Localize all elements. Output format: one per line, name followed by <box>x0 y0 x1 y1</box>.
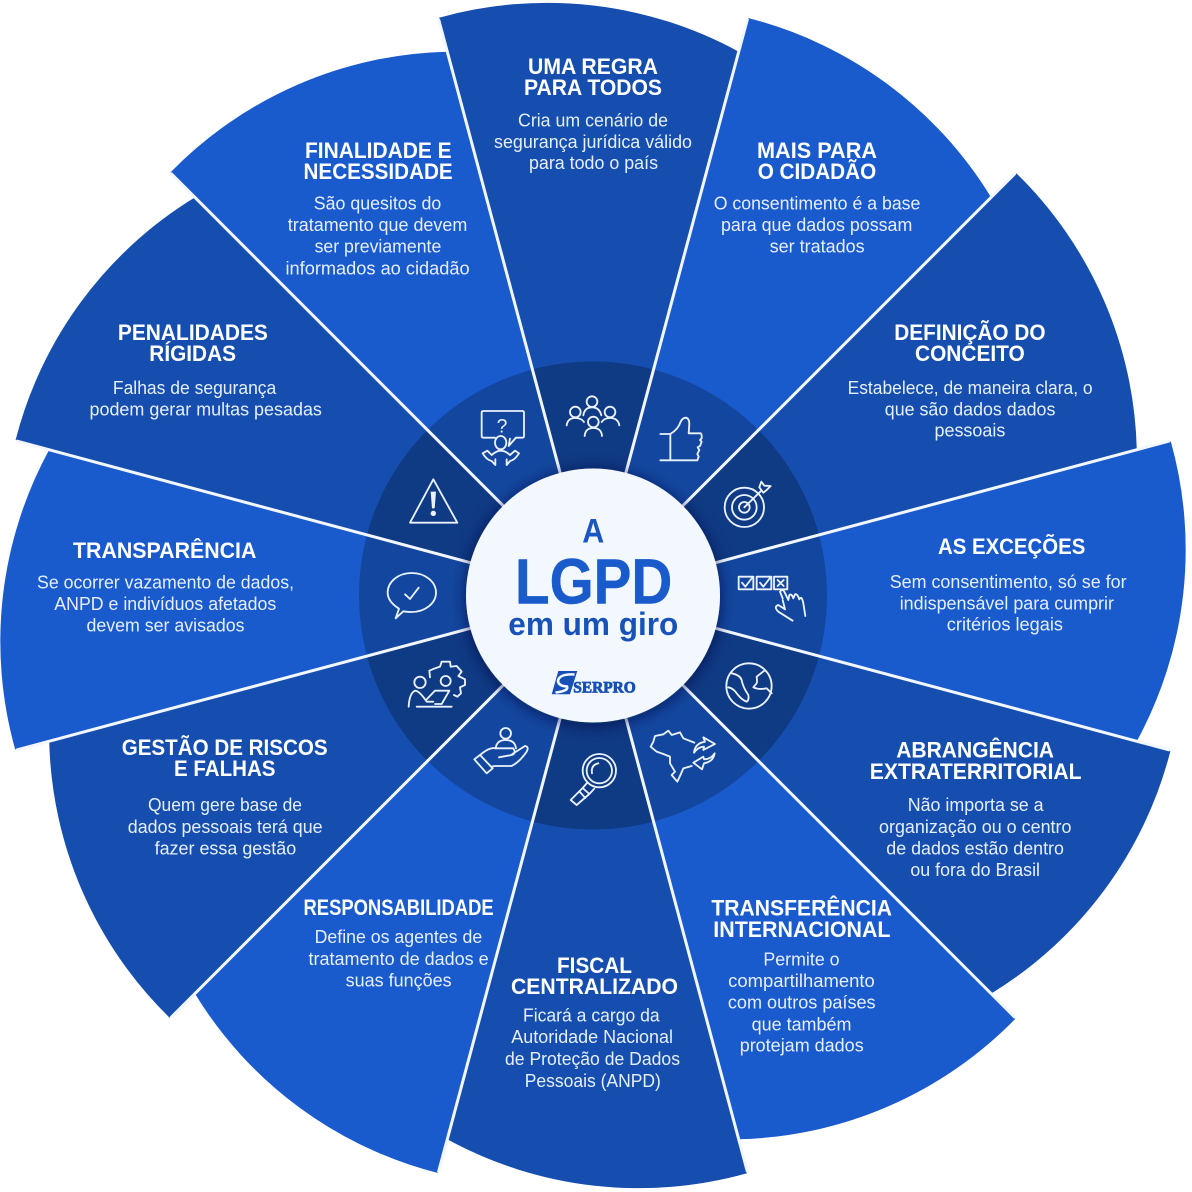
panel: definição do conceito: CONCEITO <box>915 341 1025 366</box>
panel: gestão de riscos e falhas: dados pessoais terá que <box>128 817 323 837</box>
panel: responsabilidade: suas funções <box>346 970 452 990</box>
panel: transferência internacional: que também <box>752 1015 852 1035</box>
panel: transparência: devem ser avisados <box>86 615 244 635</box>
panel: gestão de riscos e falhas <box>7 469 670 1025</box>
panel: transferência internacional: TRANSFERÊNCIA <box>711 896 892 921</box>
panel: transparência: ANPD e indivíduos afetados <box>54 594 276 614</box>
panel: penalidades rígidas: RÍGIDAS <box>149 341 236 366</box>
panel: penalidades rígidas <box>3 173 666 729</box>
panel: as exceções <box>593 442 1186 741</box>
panel: abrangência extraterritorial <box>520 462 1183 1018</box>
panel: definição do conceito: DEFINIÇÃO DO <box>894 320 1046 345</box>
icon: checkboxes and pointing hand <box>739 577 805 621</box>
panel: uma regra para todos: para todo o país <box>529 153 658 173</box>
panel: fiscal centralizado: FISCAL <box>557 953 632 978</box>
panel: definição do conceito <box>516 166 1179 722</box>
panel: abrangência extraterritorial: de dados estão dentro <box>886 838 1064 858</box>
panel: transferência internacional: compartilhamento <box>728 971 875 991</box>
panel: abrangência extraterritorial: organização ou o centro <box>879 817 1072 837</box>
logo: SERPRO: SERPRO <box>573 679 636 696</box>
panel: transparência <box>0 450 593 750</box>
title: A LGPD em um giro: em um giro <box>508 606 678 642</box>
panel: definição do conceito: Estabelece, de maneira clara, o <box>848 378 1093 398</box>
panel: transparência: Se ocorrer vazamento de dados, <box>37 573 294 593</box>
panel: transferência internacional: com outros países <box>728 993 876 1013</box>
icon: hand holding person <box>474 728 528 773</box>
panel: abrangência extraterritorial: Não importa se a <box>908 795 1045 815</box>
panel: uma regra para todos: UMA REGRA <box>528 54 658 79</box>
logo: SERPRO <box>552 671 636 696</box>
panel: as exceções: indispensável para cumprir <box>900 594 1114 614</box>
panel: fiscal centralizado: Pessoais (ANPD) <box>525 1071 661 1091</box>
icon: target <box>725 482 771 527</box>
panel: uma regra para todos: Cria um cenário de <box>518 111 668 131</box>
panel: as exceções: AS EXCEÇÕES <box>938 534 1085 559</box>
panel: fiscal centralizado: CENTRALIZADO <box>511 974 678 999</box>
panel: finalidade e necessidade: informados ao cidadão <box>286 259 470 279</box>
panel: abrangência extraterritorial: ABRANGÊNCIA <box>896 738 1054 763</box>
panel: uma regra para todos: segurança jurídica válido <box>494 132 692 152</box>
center hub <box>466 468 720 722</box>
panel: transferência internacional: INTERNACIONAL <box>713 917 890 942</box>
panel: gestão de riscos e falhas: GESTÃO DE RISCOS <box>122 735 328 760</box>
icon: people <box>567 396 619 436</box>
panel: fiscal centralizado: Autoridade Nacional <box>511 1027 673 1047</box>
icon: thumbs up <box>660 418 702 460</box>
panel: mais para o cidadão: para que dados possam <box>721 215 912 235</box>
panel: as exceções: critérios legais <box>947 615 1063 635</box>
panel: mais para o cidadão: MAIS PARA <box>757 138 877 163</box>
icon: warning triangle <box>410 479 457 523</box>
icon: brazil map with arrows <box>651 731 715 782</box>
panel: penalidades rígidas: podem gerar multas pesadas <box>90 400 322 420</box>
panel: transparência: TRANSPARÊNCIA <box>73 538 257 563</box>
title: A LGPD em um giro: A <box>582 513 604 551</box>
title: A LGPD em um giro: LGPD <box>515 545 672 617</box>
panel: penalidades rígidas: PENALIDADES <box>118 320 268 345</box>
panel: uma regra para todos <box>439 3 739 595</box>
panel: definição do conceito: pessoais <box>934 421 1005 441</box>
panel: responsabilidade: tratamento de dados e <box>308 949 489 969</box>
panel: responsabilidade: RESPONSABILIDADE <box>304 895 494 920</box>
panel: gestão de riscos e falhas: fazer essa gestão <box>155 838 296 858</box>
icon: magnifier <box>571 754 616 805</box>
panel: uma regra para todos: PARA TODOS <box>524 75 662 100</box>
panel: abrangência extraterritorial: ou fora do Brasil <box>910 860 1040 880</box>
panel: responsabilidade: Define os agentes de <box>315 927 482 947</box>
panel: responsabilidade <box>170 523 726 1186</box>
panel: fiscal centralizado: de Proteção de Dados <box>505 1049 680 1069</box>
panel: finalidade e necessidade: ser previamente <box>315 237 441 257</box>
panel: fiscal centralizado: Ficará a cargo da <box>523 1006 661 1026</box>
panel: transferência internacional: protejam dados <box>740 1036 864 1056</box>
panel: fiscal centralizado <box>447 596 747 1188</box>
panel: finalidade e necessidade: NECESSIDADE <box>304 159 453 184</box>
icon: person with question bubble: ? <box>497 416 508 437</box>
panel: finalidade e necessidade: FINALIDADE E <box>305 138 452 163</box>
panel: mais para o cidadão: O CIDADÃO <box>758 159 876 184</box>
panel: gestão de riscos e falhas: Quem gere base de <box>148 795 302 815</box>
panel: mais para o cidadão: ser tratados <box>770 237 865 257</box>
panel: transferência internacional <box>467 518 1023 1182</box>
panel: finalidade e necessidade <box>163 9 719 672</box>
panel: abrangência extraterritorial: EXTRATERRITORIAL <box>870 759 1082 784</box>
panel: finalidade e necessidade: São quesitos do <box>314 194 441 214</box>
panel: transferência internacional: Permite o <box>763 949 840 969</box>
panel: definição do conceito: que são dados dados <box>885 400 1055 420</box>
icon: person with question bubble <box>482 411 524 465</box>
panel: finalidade e necessidade: tratamento que devem <box>288 215 467 235</box>
title: A LGPD em um giro <box>508 513 678 642</box>
icon: globe <box>726 663 772 709</box>
panel: as exceções: Sem consentimento, só se for <box>890 572 1127 592</box>
panel: mais para o cidadão <box>460 5 1016 668</box>
panel: gestão de riscos e falhas: E FALHAS <box>174 756 276 781</box>
icon: person with laptop and gear <box>409 662 465 707</box>
panel: mais para o cidadão: O consentimento é a base <box>714 194 920 214</box>
icon: chat bubble with check <box>388 573 436 618</box>
panel: penalidades rígidas: Falhas de segurança <box>113 378 277 398</box>
